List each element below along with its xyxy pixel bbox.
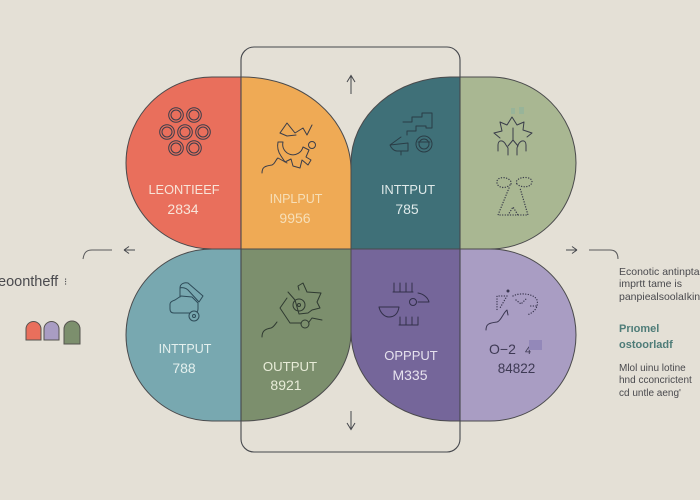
value: 785: 785: [395, 201, 419, 217]
arrow: down: [347, 411, 355, 430]
value: 9956: 9956: [279, 210, 311, 226]
label: output: OUTPUT: [263, 359, 317, 374]
label: small digit: 4: [525, 345, 531, 357]
icon: dotted route: [486, 290, 537, 330]
legend: coloured tabs: [26, 321, 80, 344]
icon: bars and semicircles: [379, 283, 429, 325]
value: 2834: 2834: [167, 201, 199, 217]
panel: sage quadrant: [460, 77, 576, 249]
panel: teal input quadrant: [351, 77, 460, 249]
heading: teal sub-heading: Prıomel: [619, 323, 659, 335]
arrow: right: [566, 246, 577, 254]
text block: note: [619, 363, 692, 399]
label: Leontief: LEONTIEEF: [148, 182, 220, 197]
heading: teal sub-heading: [619, 323, 673, 351]
panel: orange input quadrant: [241, 77, 351, 249]
heading: teal sub-heading: ostoorladf: [619, 339, 673, 351]
arrow: left: [124, 246, 135, 254]
label: opput: OPPPUT: [384, 348, 438, 363]
icon: gear: [262, 123, 316, 173]
icon: faint squares: [511, 107, 524, 114]
panel: red Leontief quadrant: [126, 77, 241, 249]
value: 788: 788: [172, 360, 196, 376]
icon: gear creature: [262, 283, 322, 337]
value: 84822: 84822: [498, 361, 535, 376]
label: input: INPLPUT: [270, 192, 323, 206]
text block: note: cd untle aeng': [619, 388, 681, 399]
icon: starburst figure: [494, 117, 532, 155]
panel: light purple quadrant: [460, 249, 576, 421]
label: intput: INTTPUT: [381, 182, 435, 197]
icon: stepped machine: [390, 113, 432, 155]
icon: bag with wheel: [170, 283, 203, 321]
value: 8921: 8921: [270, 377, 302, 393]
text block: description: imprtt tame is: [619, 278, 682, 290]
frame: central rounded rectangle: [241, 47, 460, 452]
icon: small square: [529, 340, 542, 350]
connector: left curved line: [83, 250, 112, 259]
arrow: up: [347, 76, 355, 94]
icon: dotted ribbon: [497, 177, 532, 215]
label: range: O−2: [489, 341, 516, 357]
left label mark: ⁝: [64, 277, 67, 288]
connector: right curved line: [589, 250, 618, 259]
text block: description: Econotic antinptal: [619, 266, 700, 278]
panel: green output quadrant: [241, 249, 351, 421]
icon: circle cluster: [160, 108, 210, 155]
text block: description: [619, 266, 700, 303]
panel: blue input quadrant: [126, 249, 241, 421]
text block: note: hnd cconcrictent: [619, 375, 692, 386]
label: intput: INTTPUT: [159, 342, 212, 356]
value: M335: M335: [392, 367, 428, 383]
panel: dark purple output quadrant: [351, 249, 460, 421]
text block: note: Mlol uinu lotine: [619, 363, 686, 374]
